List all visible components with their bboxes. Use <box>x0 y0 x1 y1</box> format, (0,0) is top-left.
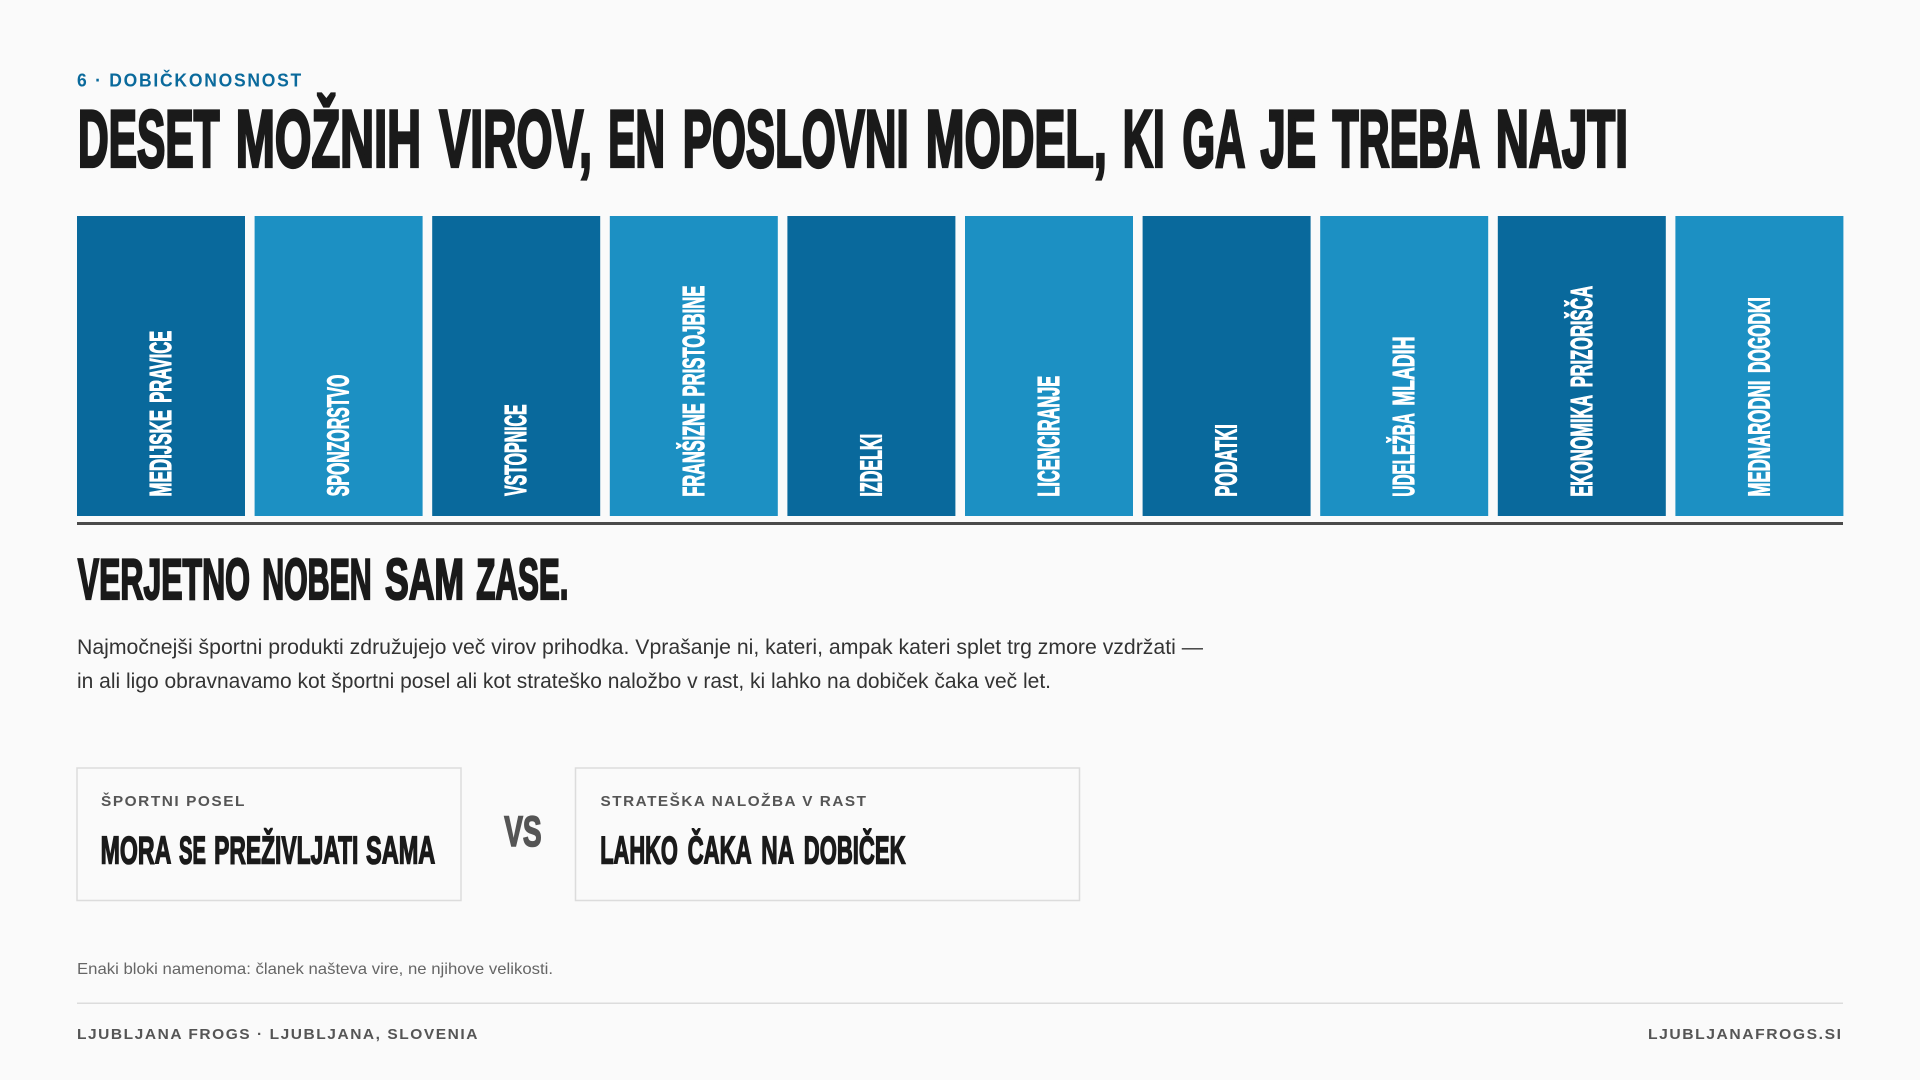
title: VIROV, <box>439 95 592 185</box>
card: strateška naložba v rast: STRATEŠKA NALOŽBA V RAST <box>600 792 868 810</box>
footer right: LJUBLJANAFROGS.SI <box>1648 1026 1842 1043</box>
subheading: ZASE. <box>476 548 568 612</box>
card: strateška naložba v rast: DOBIČEK <box>804 827 906 872</box>
block: franšizne pristojbine <box>610 216 778 516</box>
body paragraph: Najmočnejši športni produkti združujejo več virov prihodka. Vprašanje ni, kateri, ampak kateri splet trg zmore vzdržati — <box>77 636 1203 659</box>
title: MOŽNIH <box>236 95 421 185</box>
title: KI <box>1123 95 1165 185</box>
block: mednarodni dogodki <box>1675 216 1843 516</box>
block: podatki <box>1143 216 1311 516</box>
title: TREBA <box>1332 95 1480 185</box>
footer left: LJUBLJANA FROGS · LJUBLJANA, SLOVENIA <box>77 1026 479 1043</box>
block: podatki: PODATKI <box>1210 424 1244 497</box>
block: ekonomika prizorišča: EKONOMIKA <box>1565 395 1599 497</box>
block: sponzorstvo: SPONZORSTVO <box>322 375 356 496</box>
footnote: Enaki bloki namenoma: članek našteva vire, ne njihove velikosti. <box>77 961 553 978</box>
block: medijske pravice: MEDIJSKE <box>144 410 178 497</box>
block: vstopnice <box>432 216 600 516</box>
title: DESET <box>78 95 220 185</box>
card: strateška naložba v rast: ČAKA <box>688 827 752 872</box>
title: POSLOVNI <box>683 95 909 185</box>
subheading: VERJETNO <box>78 548 250 612</box>
title <box>78 95 1628 185</box>
block: mednarodni dogodki: DOGODKI <box>1742 297 1776 373</box>
title: GA <box>1182 95 1245 185</box>
card: športni posel: SE <box>179 829 206 872</box>
title: MODEL, <box>926 95 1107 185</box>
card: športni posel: ŠPORTNI POSEL <box>101 792 246 810</box>
card: športni posel: PREŽIVLJATI <box>214 828 358 872</box>
card: športni posel: MORA <box>101 829 171 872</box>
block: izdelki: IZDELKI <box>854 434 888 497</box>
subheading <box>78 548 569 612</box>
block: ekonomika prizorišča: PRIZORIŠČA <box>1563 286 1599 387</box>
section eyebrow: 6 · DOBIČKONOSNOST <box>77 70 303 90</box>
block: udeležba mladih: MLADIH <box>1387 337 1421 406</box>
block: udeležba mladih <box>1320 216 1488 516</box>
block: franšizne pristojbine: PRISTOJBINE <box>677 286 711 397</box>
block: izdelki <box>787 216 955 516</box>
block: ekonomika prizorišča <box>1498 216 1666 516</box>
block: mednarodni dogodki: MEDNARODNI <box>1742 381 1776 497</box>
block: medijske pravice: PRAVICE <box>144 331 178 403</box>
title: JE <box>1260 95 1316 185</box>
block: medijske pravice <box>77 216 245 516</box>
card: športni posel <box>77 768 461 900</box>
block: franšizne pristojbine: FRANŠIZNE <box>675 403 711 497</box>
title: EN <box>608 95 665 185</box>
card: strateška naložba v rast <box>576 768 1080 900</box>
block: licenciranje <box>965 216 1133 516</box>
block: licenciranje: LICENCIRANJE <box>1032 376 1066 497</box>
subheading: SAM <box>385 548 464 612</box>
card: strateška naložba v rast: LAHKO <box>600 829 678 872</box>
block: vstopnice: VSTOPNICE <box>499 404 533 496</box>
card: strateška naložba v rast: NA <box>761 829 794 872</box>
body paragraph: in ali ligo obravnavamo kot športni posel ali kot strateško naložbo v rast, ki lahko na dobiček čaka več let. <box>77 670 1051 693</box>
title: NAJTI <box>1496 95 1628 185</box>
card: športni posel: SAMA <box>366 829 435 872</box>
vs label: VS <box>504 808 542 856</box>
block: udeležba mladih: UDELEŽBA <box>1385 413 1421 497</box>
body paragraph <box>77 636 1203 693</box>
block: sponzorstvo <box>255 216 423 516</box>
subheading: NOBEN <box>262 548 372 612</box>
revenue source blocks <box>77 216 1843 516</box>
